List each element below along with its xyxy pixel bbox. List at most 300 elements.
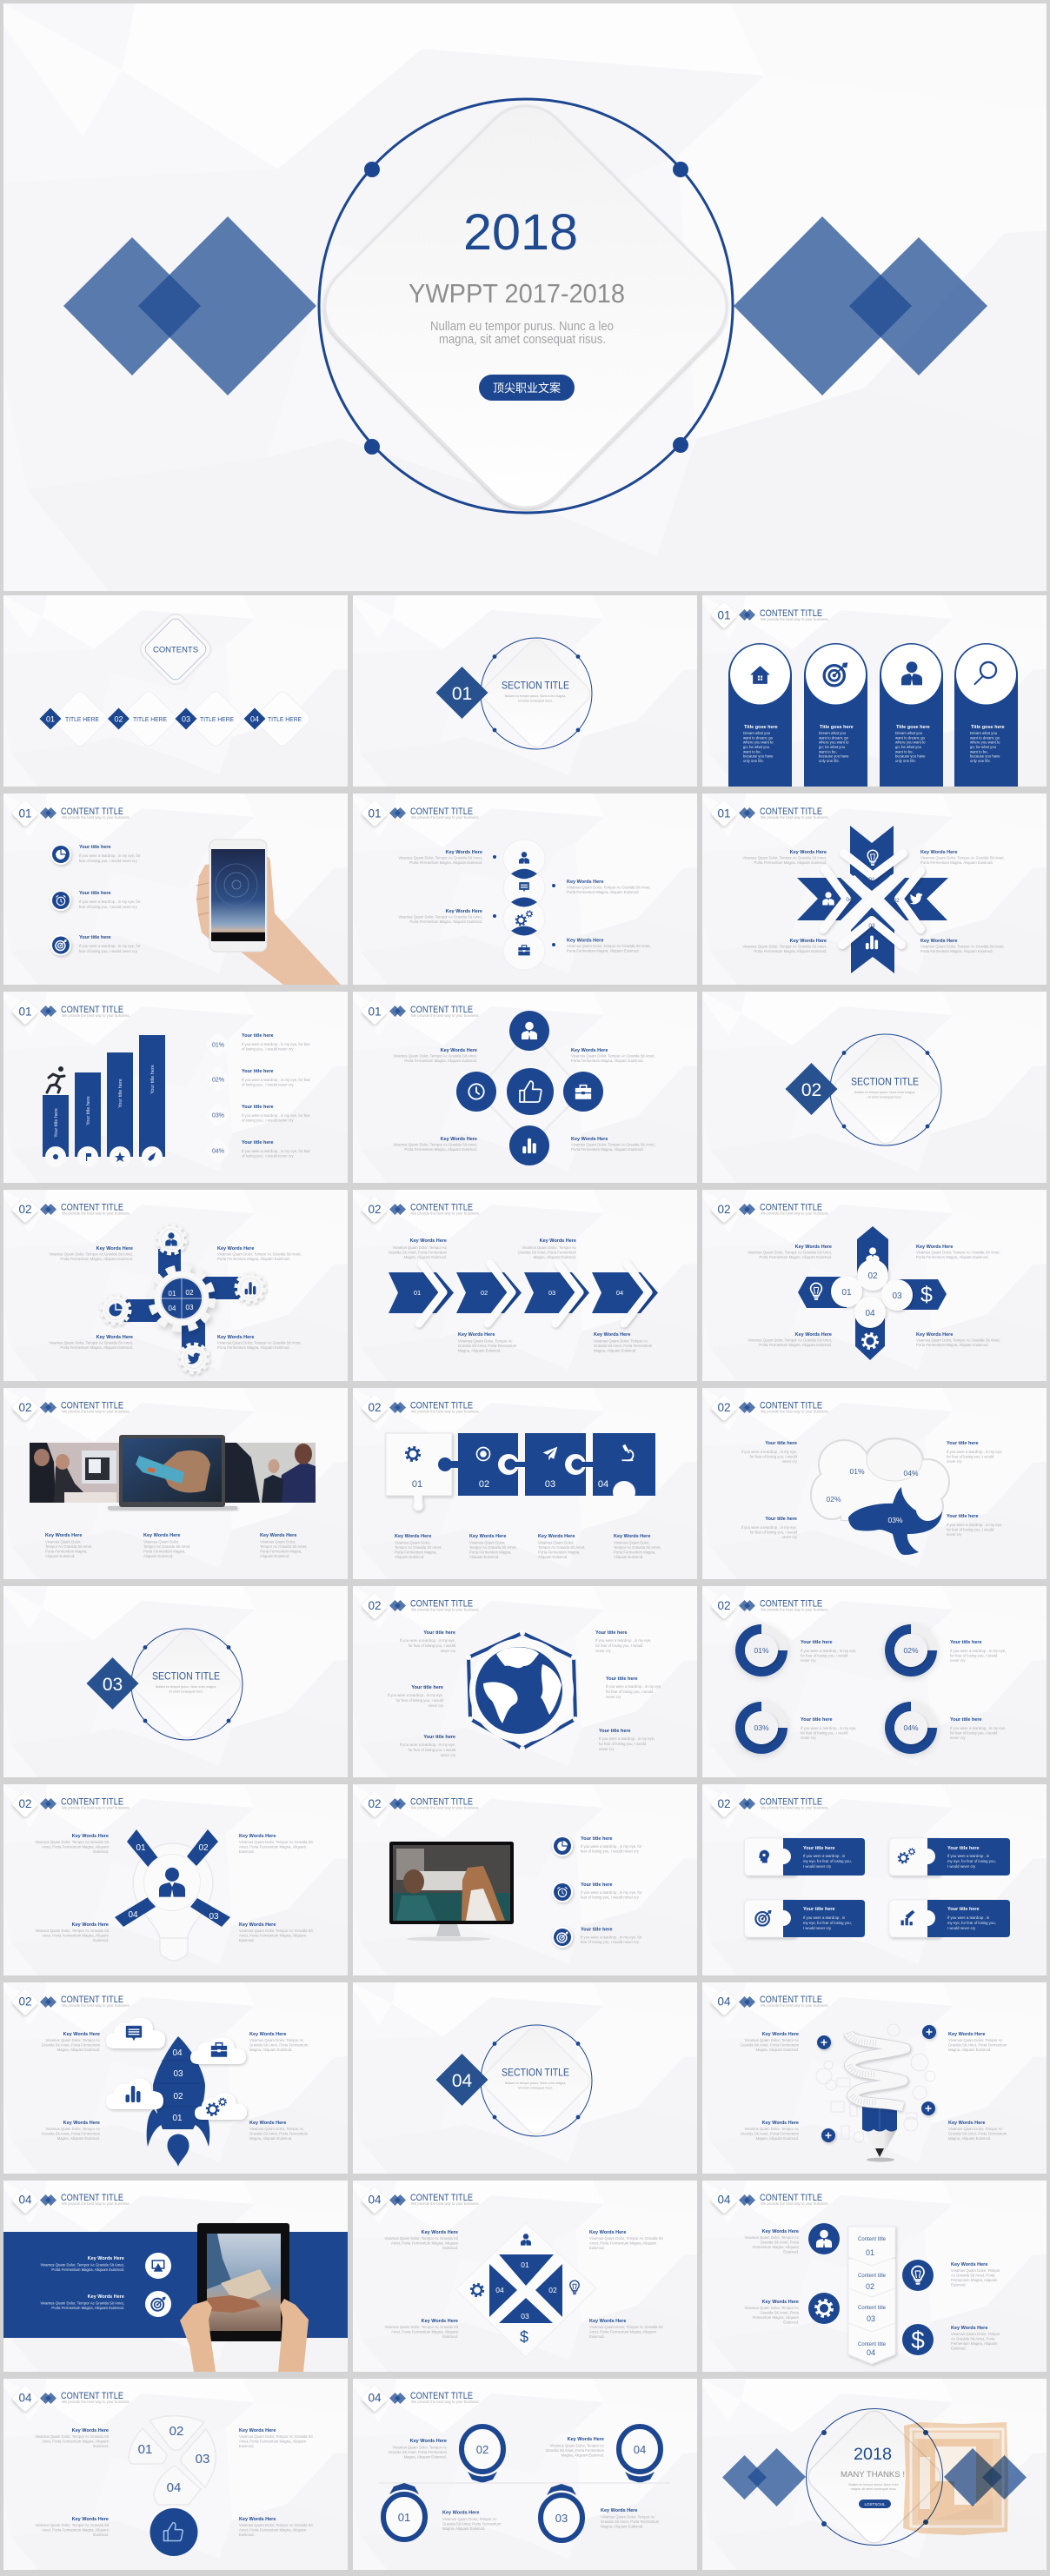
item 3 — [552, 1927, 642, 1948]
text block 2: Amet, Porta Fermentum Magna, Aliquam — [239, 1844, 306, 1849]
text block 3 — [35, 2517, 110, 2537]
card 2: go; be what you — [819, 745, 846, 749]
plus buttons — [817, 2025, 936, 2142]
item 1 — [50, 844, 141, 865]
text block 2: Vivamus Quam Dolor, Tempor Ac — [550, 2444, 605, 2447]
text block 2: Key Words Here — [948, 2032, 985, 2037]
text block 3: Key Words Here — [951, 2262, 987, 2267]
text block 4: Key Words Here — [217, 1335, 254, 1340]
panel: blue cross slide — [702, 1190, 1047, 1381]
text block 1: Euismod. — [442, 2246, 458, 2250]
petal diagram — [129, 2415, 216, 2556]
text block 1 — [42, 2032, 101, 2052]
content column — [848, 2227, 895, 2364]
section number: 03 — [103, 1675, 123, 1695]
slide header: CONTENT TITLE — [760, 807, 822, 817]
text block 6 — [599, 1729, 655, 1751]
card 2: want to be, — [819, 749, 837, 754]
panel: cloud brain slide — [702, 1388, 1047, 1579]
cross diagram: 04 — [865, 1309, 875, 1318]
pill button — [859, 2500, 891, 2508]
text block 2 — [916, 1245, 1000, 1259]
bar chart: Your title here — [86, 1096, 91, 1125]
section text — [854, 1091, 915, 1099]
text block 3: Gravida Sit Amet, Porta Fermentum — [458, 1344, 517, 1348]
chevron star diagram: 03 — [868, 923, 875, 929]
item 2 — [50, 890, 141, 911]
list text 1: of losing you , I would never cry — [242, 1046, 294, 1052]
slide header: CONTENT TITLE — [760, 1797, 822, 1808]
card 1: Title gose here — [744, 725, 778, 730]
text block 3: Vivamus Quam Dolor, Tempor Ac — [745, 2127, 800, 2131]
item 2: Your title here — [581, 1882, 613, 1888]
text block 2: Key Words Here — [916, 1245, 953, 1250]
text block 1: Euismod. — [93, 1849, 109, 1854]
slide header: 02 — [18, 1995, 32, 2008]
text block 3 — [742, 939, 827, 953]
card 1: because you have — [743, 754, 774, 759]
slide header: 02 — [368, 1599, 382, 1612]
slide header: 02 — [18, 1401, 32, 1414]
arrow chain: 03 — [548, 1289, 555, 1297]
item 2: Your title here — [79, 891, 111, 896]
description — [848, 2483, 899, 2491]
text block 3: Aliquam Euismod. — [260, 1554, 289, 1558]
text block 2: Euismod. — [239, 2444, 255, 2448]
text block 2: Vivamus Quam Dolor, Tempor Ac Gravida Sit Amet, — [40, 2301, 124, 2305]
item 1: fear of losing you, I would never cry — [79, 859, 138, 863]
text block 3: Key Words Here — [96, 1335, 133, 1340]
text block 4: Your title here — [947, 1514, 979, 1519]
text block 1: never cry — [441, 1649, 456, 1653]
cloud with briefcase icon — [190, 2037, 246, 2064]
slide header — [710, 1394, 829, 1422]
list text 2 — [242, 1069, 310, 1086]
panel: section 01 slide — [353, 595, 697, 787]
item 1: If you were a teardrop , in my eye, for — [581, 1844, 642, 1849]
cross diagram: 01 — [841, 1288, 852, 1298]
text block 3 — [538, 1534, 585, 1559]
text block 4: Euismod. — [951, 2347, 967, 2350]
slide header: 04 — [717, 2194, 731, 2206]
text block 3: Porta Fermentum Magna, Aliquam Euismod. — [754, 949, 827, 953]
text block 3: Vivamus Quam Dolor, — [260, 1540, 296, 1544]
description: Nullam eu tempor purus, Nunc a leo — [848, 2483, 899, 2486]
text block 4 — [951, 2326, 1000, 2350]
item 2: fear of losing you, I would never cry — [79, 905, 138, 909]
slide header: 01 — [18, 807, 32, 820]
section text: Nullam eu tempor purus, Nunc a leo magna, — [854, 1091, 915, 1094]
arrow chain: 02 — [481, 1289, 488, 1297]
text block 3: never cry — [782, 1535, 798, 1539]
panel: section 04 slide — [353, 1982, 697, 2174]
slide header: 04 — [717, 1995, 731, 2008]
panel: monitor slide — [353, 1784, 697, 1975]
pencil with spiral stairs — [848, 2033, 906, 2162]
text block 2 — [571, 1048, 655, 1063]
button: target icon — [145, 2291, 171, 2317]
bulb diagram: 02 — [198, 1843, 209, 1853]
item 04: TITLE HERE — [268, 717, 302, 723]
text block 2: Porta Fermentum Magna, Aliquam Euismod. — [920, 860, 994, 865]
text block 2: Key Words Here — [239, 1834, 276, 1839]
text block 1: Porta Fermentum Magna, — [45, 1549, 87, 1554]
text block 4 — [217, 1335, 302, 1350]
arrow chain — [389, 1264, 658, 1324]
slide header: 02 — [717, 1401, 731, 1414]
slide header — [710, 2187, 829, 2214]
text block 1: Key Words Here — [72, 1834, 109, 1839]
slide header: CONTENT TITLE — [410, 1797, 473, 1808]
text block 3 — [741, 1517, 798, 1539]
percent list — [204, 1031, 232, 1165]
text block 3: Porta Fermentum Magna, — [538, 1550, 580, 1554]
text block 2: Tempor Ac Gravida Sit Amet, — [143, 1544, 190, 1549]
list text 4: of losing you , I would never cry — [242, 1154, 294, 1158]
text block 1: Porta Fermentum Magna, — [395, 1550, 436, 1554]
card 4: I would never cry — [947, 1926, 976, 1930]
slide header: 04 — [18, 2194, 32, 2206]
text block 3: Euismod. — [442, 2334, 458, 2339]
arrow chain: 01 — [414, 1289, 421, 1297]
text block 2 — [589, 2230, 663, 2250]
card 2: want to dream; go — [819, 735, 849, 740]
section graphic — [87, 1627, 244, 1742]
card 1: only one life. — [743, 759, 764, 763]
slide header — [361, 1394, 480, 1422]
text block 4: Your title here — [950, 1717, 982, 1723]
panel: bar chart slide — [3, 992, 348, 1183]
text block 3: Tempor Ac Gravida Sit Amet, — [260, 1544, 307, 1549]
panel: hero cover slide — [3, 3, 1047, 591]
text block 4: If you were a teardrop , in my eye, — [947, 1523, 1002, 1527]
text block 2: Vivamus Quam Dolor, Tempor Ac Gravida Sit Amet, — [571, 1053, 655, 1059]
pill button — [479, 375, 575, 401]
text block 1: Porta Fermentum Magna, Aliquam Euismod. — [759, 1255, 832, 1259]
item 2 — [552, 1882, 642, 1902]
text block 1 — [741, 1441, 798, 1464]
text block 1 — [45, 1533, 92, 1558]
text block 1: Key Words Here — [422, 2230, 458, 2235]
text block 3: Vivamus Quam Dolor, Tempor Ac — [442, 2517, 497, 2521]
text block 4 — [239, 2517, 313, 2537]
bulb diagram — [115, 1829, 230, 1961]
card 3: Your title here — [803, 1907, 835, 1912]
text block 2: for fear of losing you, I would — [947, 1455, 994, 1458]
text block 1: Key Words Here — [72, 2428, 109, 2433]
cross diagram: $ — [920, 1283, 933, 1307]
slide header: CONTENT TITLE — [410, 1599, 473, 1610]
text block 1: Gravida Sit Amet, Porta Fermentum — [42, 2042, 100, 2048]
slide header: We provide the best way to your business. — [62, 1212, 130, 1215]
text block 2: Amet, Porta Fermentum Magna, Aliquam — [589, 2241, 656, 2246]
text block 1: Porta Fermentum Magna, Aliquam Euismod. — [409, 860, 482, 865]
card 2: because you have — [819, 754, 849, 759]
slide header: We provide the best way to your business. — [62, 2003, 130, 2008]
text block 2: never cry — [947, 1459, 962, 1464]
subtitle: YWPPT 2017-2018 — [409, 278, 625, 309]
content column: 01 — [866, 2248, 874, 2257]
text block 3: Key Words Here — [458, 1332, 495, 1338]
content column: 02 — [866, 2282, 874, 2291]
text block 4: Vivamus Quam Dolor, Tempor Ac Gravida Sit — [589, 2325, 663, 2329]
text block 2: Amet, Porta Fermentum Magna, Aliquam — [239, 2439, 306, 2444]
text block 3: never cry — [441, 1753, 456, 1757]
badge 01: 01 — [398, 2511, 410, 2524]
text block 1: Gravida Sit Amet, Porta Fermentum — [741, 2042, 799, 2048]
list text 1 — [242, 1033, 310, 1052]
slide header: 04 — [18, 2392, 32, 2404]
card 1: my eye, for fear of losing you, — [803, 1859, 852, 1863]
gears diagram: 02 — [186, 1289, 194, 1297]
text block 2: Euismod. — [783, 2320, 799, 2324]
petal diagram: 02 — [169, 2424, 183, 2439]
item 1 — [552, 1836, 642, 1856]
slide header — [710, 1988, 829, 2016]
gears diagram — [101, 1225, 264, 1373]
year: 2018 — [854, 2446, 892, 2464]
card 1 — [744, 1838, 865, 1876]
photo: office workers — [30, 1443, 121, 1503]
text block 1: Key Words Here — [762, 2032, 799, 2037]
icon: dollar circle: $ — [911, 2327, 925, 2354]
section text: sit amet consequat risus. — [518, 699, 553, 702]
text block 5: Your title here — [606, 1676, 638, 1682]
rocket: 01 — [172, 2114, 183, 2123]
text block 3: If you were a teardrop , in my eye, — [801, 1726, 856, 1730]
text block 3: Key Words Here — [441, 1137, 477, 1142]
card 1: If you were a teardrop , in — [803, 1854, 846, 1858]
slide header: CONTENT TITLE — [410, 1401, 473, 1411]
list text 2: If you were a teardrop , in my eye, for fear — [242, 1078, 310, 1082]
text block 4: Key Words Here — [239, 2517, 276, 2522]
text block 1: Your title here — [423, 1630, 455, 1636]
text block 2: Vivamus Quam Dolor, Tempor Ac Gravida Sit Amet, — [916, 1250, 1000, 1255]
panel: ring badges slide — [353, 2379, 697, 2570]
text block 3: Euismod. — [93, 2533, 109, 2537]
text block 2: Vivamus Quam Dolor, Tempor Ac Gravida Sit — [589, 2236, 663, 2241]
text block 2: Key Words Here — [589, 2230, 626, 2235]
text block 3: for fear of losing you, I would — [409, 1748, 456, 1752]
section graphic — [786, 1032, 943, 1147]
slide header: CONTENT TITLE — [760, 608, 822, 619]
text block 4: Vivamus Quam Dolor, Tempor Ac Gravida Sit — [239, 1929, 313, 1933]
text block 1: Gravida Sit Amet, Porta — [761, 2241, 800, 2244]
item 3: If you were a teardrop , in my eye, for — [581, 1935, 642, 1940]
text block 1: Vivamus Quam Dolor, Tempor Ac Gravida Sit Amet, — [742, 855, 827, 860]
text block 2: Key Words Here — [88, 2294, 124, 2300]
text block 4: Fermentum Magna, Aliquam — [951, 2341, 998, 2346]
card 3: If you were a teardrop , in — [803, 1915, 846, 1920]
card 1: Your title here — [803, 1846, 835, 1851]
card 3 — [880, 643, 943, 787]
text block 3: Vivamus Quam Dolor, Tempor — [951, 2268, 1000, 2273]
slide header — [11, 800, 130, 827]
slide header — [710, 800, 829, 827]
text block 1: Gravida Sit Amet, Porta Fermentum — [389, 1250, 447, 1255]
text block 2 — [249, 2032, 309, 2052]
pill button: LOSTSOUL — [864, 2502, 886, 2506]
text block 1: never cry — [782, 1459, 798, 1464]
rocket: 02 — [173, 2092, 183, 2101]
text block 3: Vivamus Quam Dolor, Tempor Ac Gravida Sit Amet, — [748, 1338, 832, 1342]
section text: Nullam eu tempor purus, Nunc a leo magna, — [505, 2081, 566, 2085]
ring with dots — [319, 99, 733, 513]
pill button: 顶尖职业文案 — [493, 382, 561, 395]
card 1: want to dream; go — [743, 735, 774, 740]
right overlapping diamonds — [734, 216, 987, 395]
bulb diagram: 03 — [209, 1912, 219, 1922]
panel: contents slide — [3, 595, 348, 787]
text block 4: Euismod. — [239, 1938, 255, 1942]
year title: 2018 — [463, 204, 578, 261]
text block 4 — [239, 1922, 313, 1942]
text block 3: Key Words Here — [790, 939, 827, 944]
donut 01: 01% — [754, 1646, 769, 1655]
card 2: I would never cry — [947, 1864, 976, 1869]
card 3: Title gose here — [896, 725, 930, 730]
text block 2: Key Words Here — [762, 2300, 799, 2305]
item 3: fear of losing you, I would never cry — [79, 949, 138, 953]
slide header: We provide the best way to your business. — [761, 1608, 829, 1611]
card 4: because you have — [970, 754, 1000, 759]
text block 1: Key Words Here — [795, 1245, 832, 1250]
text block 3: Key Words Here — [538, 1534, 575, 1539]
panel: four cards slide — [702, 595, 1047, 787]
text block 1: Gravida Sit Amet, Porta Fermentum — [389, 2450, 447, 2454]
text block 1 — [395, 1534, 442, 1559]
slide header: 02 — [18, 1797, 32, 1810]
card 3: go; be what you — [895, 745, 922, 749]
panel: puzzle slide — [353, 1388, 697, 1579]
text block 2: Porta Fermentum Magna, Aliquam Euismod. — [51, 2306, 124, 2310]
left overlapping diamonds — [63, 216, 316, 395]
text block 1 — [389, 2439, 448, 2460]
text block 1 — [745, 2229, 800, 2254]
slide header: CONTENT TITLE — [410, 1005, 473, 1015]
donut 02: 02% — [903, 1646, 919, 1655]
text block 1 — [748, 1245, 832, 1259]
slide header: We provide the best way to your business. — [411, 1212, 480, 1215]
text block 2: Porta Fermentum Magna, Aliquam Euismod. — [567, 890, 640, 894]
item 2: If you were a teardrop , in my eye, for — [581, 1890, 642, 1895]
text block 2: Vivamus Quam Dolor, Tempor Ac Gravida Sit Amet, — [920, 855, 1005, 860]
text block 4: Tempor Ac Gravida Sit Amet, — [614, 1545, 661, 1550]
cloud diagram: 02% — [826, 1495, 841, 1504]
text block 4: never cry — [595, 1649, 611, 1653]
item 3 — [50, 935, 141, 956]
text block 3 — [458, 1332, 517, 1352]
text block 3: If you were a teardrop , in my eye, — [400, 1743, 455, 1747]
text block 2 — [217, 1246, 302, 1261]
cloud diagram: 03% — [887, 1516, 903, 1524]
text block 1: Vivamus Quam Dolor, Tempor Ac — [745, 2235, 800, 2240]
description: magna, sit amet consequat risus. — [851, 2487, 896, 2491]
text block 1: Key Words Here — [762, 2229, 799, 2234]
cloud diagram — [811, 1438, 949, 1555]
text block 4: Key Words Here — [916, 1332, 953, 1338]
description — [430, 320, 614, 347]
card 4: go; be what you — [970, 745, 997, 749]
cross diagram: 02 — [867, 1271, 878, 1281]
text block 1: Amet, Porta Fermentum Magna, Aliquam — [391, 2241, 458, 2246]
slide header: CONTENT TITLE — [61, 1797, 123, 1808]
text block 3: Key Words Here — [442, 2510, 479, 2515]
card 4: only one life. — [970, 759, 991, 763]
slide header: CONTENT TITLE — [760, 1401, 822, 1411]
text block 3: Your title here — [765, 1517, 797, 1522]
text block 2: If you were a teardrop , in my eye, — [950, 1649, 1006, 1653]
circle cross diagram — [456, 1011, 603, 1165]
text block 2 — [469, 1534, 516, 1559]
text block 3: Tempor Ac Gravida Sit Amet, — [538, 1545, 585, 1550]
slide header: 01 — [368, 807, 382, 820]
text block 4: never cry — [947, 1532, 962, 1537]
badge 03 — [541, 2484, 582, 2540]
panel: gears slide — [3, 1190, 348, 1381]
text block 1: Magna, Aliquam Euismod. — [404, 1255, 447, 1259]
panel: arrow process slide — [353, 1190, 697, 1381]
text block 4 — [948, 2121, 1007, 2141]
slide header — [361, 1790, 480, 1818]
right diamonds — [944, 2448, 1027, 2506]
text block 1: Key Words Here — [441, 1048, 477, 1053]
gears diagram: 01 — [169, 1290, 176, 1298]
text block 4 — [571, 1137, 655, 1152]
slide header: We provide the best way to your business. — [411, 1013, 480, 1018]
ring with dots — [807, 2409, 942, 2545]
slide header — [710, 601, 829, 629]
text block 2: Porta Fermentum Magna, Aliquam Euismod. — [916, 1255, 989, 1259]
text block 2: Vivamus Quam Dolor, Tempor Ac Gravida Sit — [239, 1840, 313, 1844]
text block 2: Porta Fermentum Magna, Aliquam Euismod. — [217, 1257, 290, 1261]
slide header: 02 — [18, 1203, 32, 1216]
slide header — [361, 800, 480, 827]
text block 1: If you were a teardrop , in my eye, — [801, 1649, 856, 1653]
text block 1 — [389, 1238, 448, 1259]
item 1: Your title here — [581, 1836, 613, 1842]
text block 4: Vivamus Quam Dolor, Tempor Ac — [594, 1338, 648, 1344]
content column: 04 — [867, 2348, 875, 2357]
section text: sit amet consequat risus. — [518, 2086, 553, 2089]
text block 2: Aliquam Euismod. — [143, 1554, 173, 1558]
text block 1: Key Words Here — [395, 1534, 431, 1539]
text block 2: If you were a teardrop , in my eye, — [388, 1693, 443, 1697]
timeline circles — [493, 840, 555, 970]
slide header — [361, 1196, 480, 1224]
photo: meeting — [225, 1443, 316, 1503]
text block 3: Key Words Here — [260, 1533, 296, 1538]
slide header — [361, 2187, 480, 2214]
text block 2: Gravida Sit Amet, Porta — [761, 2310, 800, 2315]
orange stamp watermark — [903, 2422, 1008, 2535]
text block 4: Vivamus Quam Dolor, — [614, 1540, 649, 1545]
blue band — [3, 2232, 348, 2338]
section title: SECTION TITLE — [502, 2068, 569, 2079]
text block 4: Gravida Sit Amet, Porta Fermentum — [601, 2520, 660, 2524]
text block 2: Vivamus Quam Dolor, Tempor Ac Gravida Sit Amet, — [567, 885, 651, 890]
text block 4: Porta Fermentum Magna, Aliquam Euismod. — [916, 1343, 989, 1347]
text block 2: Key Words Here — [571, 1048, 608, 1053]
text block 3: Porta Fermentum Magna, Aliquam Euismod. — [759, 1343, 832, 1347]
text block 3: Gravida Sit Amet, Porta Fermentum — [741, 2131, 799, 2136]
card 3: because you have — [895, 754, 926, 759]
text block 4 — [601, 2508, 660, 2529]
text block 1: Your title here — [765, 1441, 797, 1446]
text block 3: Vivamus Quam Dolor, Tempor Ac Gravida Sit Amet, — [398, 914, 482, 920]
text block 1 — [801, 1640, 856, 1663]
slide header: We provide the best way to your business. — [411, 2400, 480, 2404]
